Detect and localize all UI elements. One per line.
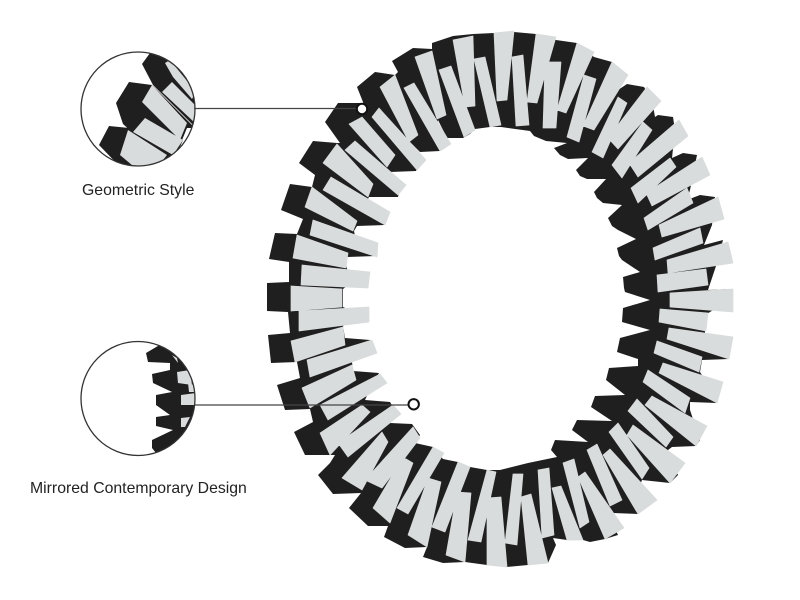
circular mirror [267, 31, 733, 567]
callout: mirrored contemporary design [30, 342, 419, 497]
marker dot: mirrored design [408, 399, 419, 409]
mirror dark backing ring [267, 32, 732, 567]
mirror tiles [291, 31, 733, 567]
callout: geometric style [81, 52, 367, 199]
label: geometric style: Geometric Style [82, 182, 195, 199]
leader line: mirrored design [195, 404, 408, 406]
zoom circle: geometric detail [81, 52, 198, 172]
zoom circle: mirrored detail [81, 342, 200, 458]
marker dot: geometric style [357, 104, 367, 114]
leader line: geometric style [194, 108, 357, 110]
label: mirrored contemporary design: Mirrored Contemporary Design [30, 480, 247, 497]
infographic canvas [31, 30, 734, 568]
